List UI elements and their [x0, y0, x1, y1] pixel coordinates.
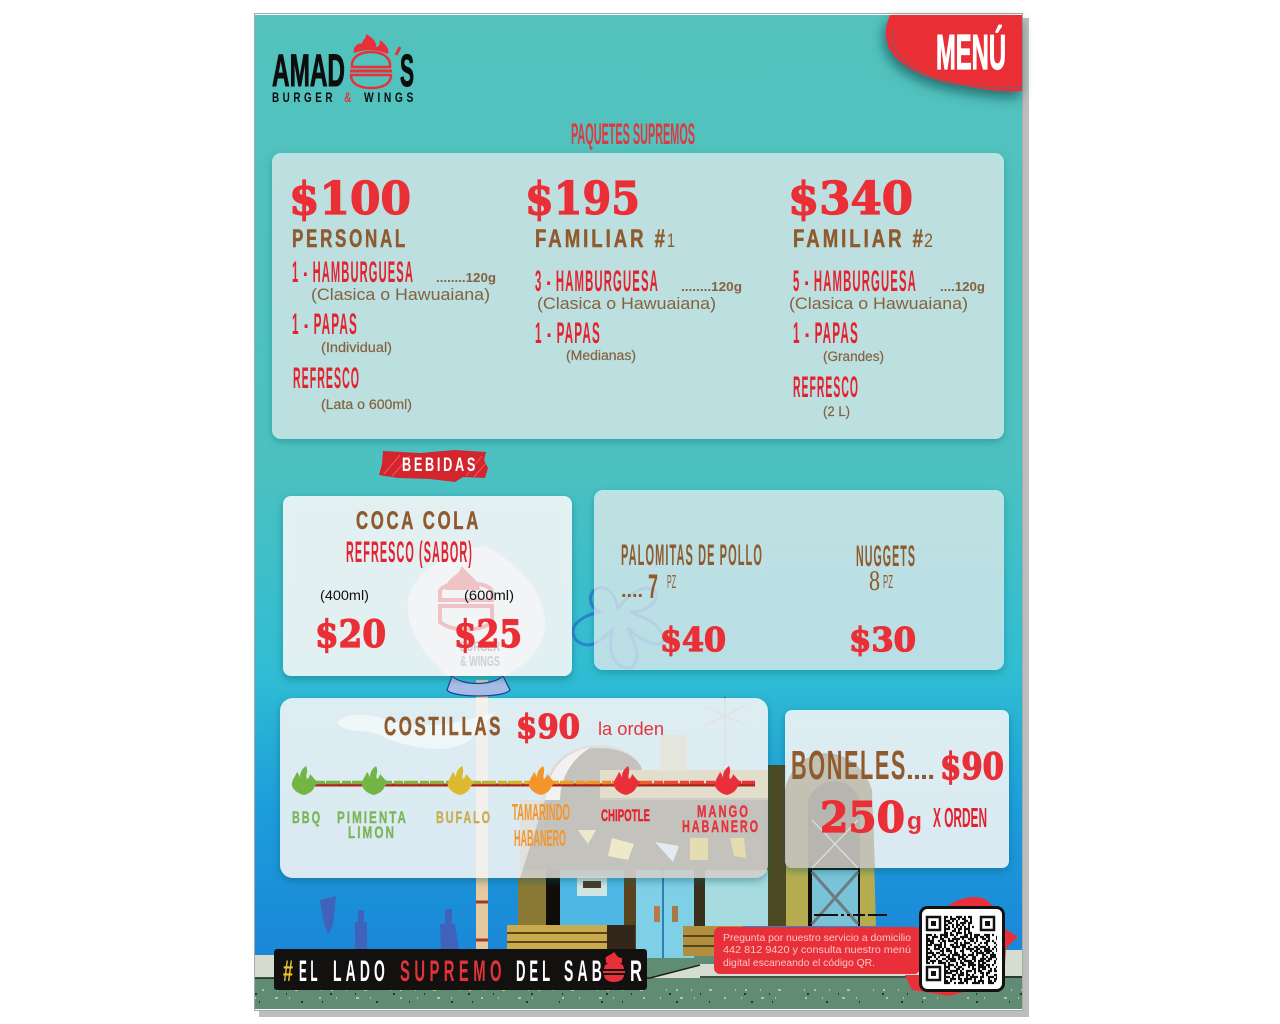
- package: personal: (Clasica o Hawuaiana): [311, 285, 490, 304]
- ghost logo behind soda prices: [440, 566, 500, 670]
- ghost arch inside boneles panel: [785, 753, 875, 868]
- bar background: [274, 949, 647, 990]
- nuggets quantity: [869, 566, 893, 597]
- package: familiar 1: [525, 172, 742, 363]
- package: personal: (Individual): [321, 340, 392, 355]
- logo wordmark: AMAD: [272, 45, 345, 96]
- logo tagline: WINGS: [364, 89, 417, 105]
- title: BONELES: [791, 742, 907, 788]
- title: COSTILLAS: [384, 711, 503, 741]
- card: costillas: TAMARINDO: [512, 799, 570, 825]
- wooden planks: [507, 925, 607, 949]
- page drop shadow: [259, 18, 1029, 1017]
- card: palomitas and nuggets: PALOMITAS DE POLLO: [621, 539, 763, 572]
- flame: bufalo: [448, 766, 475, 795]
- heat scale rope: [300, 782, 755, 785]
- package: familiar 1: (Medianas): [566, 348, 636, 363]
- package: familiar 1: (Clasica o Hawuaiana): [537, 294, 716, 313]
- text: PAQUETES SUPREMOS: [571, 118, 695, 151]
- palomitas quantity: ....: [621, 580, 643, 602]
- flame: chipotle: [614, 766, 641, 795]
- page frame: [254, 14, 1022, 1010]
- label: pimienta limon: [337, 808, 408, 842]
- qr code: [920, 908, 1004, 990]
- flame: pimienta limon: [362, 766, 389, 795]
- logo tagline: [272, 89, 417, 105]
- price: $100: [289, 172, 411, 225]
- card: boneles: [791, 742, 1004, 842]
- card: costillas: HABANERO: [514, 825, 566, 851]
- badge brush shape: [379, 450, 488, 482]
- slogan bar: SUPREMO: [400, 955, 506, 988]
- price 600: $25: [454, 612, 522, 656]
- menu badge: MENÚ: [936, 25, 1006, 80]
- name: PERSONAL: [292, 225, 408, 253]
- label: mango habanero: MANGO: [697, 802, 750, 821]
- palomitas price: $40: [660, 620, 726, 659]
- logo tagline: &: [344, 89, 355, 105]
- package: personal: 1 - HAMBURGUESA: [292, 256, 414, 289]
- callout text: [723, 932, 911, 969]
- ghost building inside costillas panel: [520, 735, 768, 878]
- panel: paquetes supremos background: [272, 153, 1004, 439]
- palomitas quantity: 7: [648, 568, 658, 606]
- bottles: [320, 896, 459, 952]
- package: familiar 1: 1 - PAPAS: [535, 317, 601, 350]
- package: familiar 2: 2: [924, 231, 933, 252]
- qr finder centers: [931, 921, 990, 976]
- panel: boneles background: [785, 710, 1009, 868]
- callout text: 442 812 9420 y consulta nuestro menú: [723, 944, 911, 956]
- flag pole: [476, 680, 488, 952]
- card: boneles: X ORDEN: [933, 802, 987, 833]
- badge text: BEBIDAS: [402, 455, 478, 476]
- weight: 250: [820, 793, 905, 842]
- label: tamarindo habanero: [512, 799, 570, 851]
- slogan bar: EL: [299, 955, 321, 988]
- gram unit: g: [907, 808, 922, 835]
- bebidas badge: [379, 450, 488, 482]
- package: familiar 1: 3 - HAMBURGUESA: [535, 265, 659, 298]
- package: familiar 1: 1: [667, 231, 675, 252]
- logo: S: [400, 45, 414, 96]
- nuggets quantity: 8: [869, 566, 880, 597]
- callout bubble: [714, 927, 920, 974]
- character: white cloud head: [408, 546, 545, 676]
- package: familiar 2: REFRESCO: [793, 371, 859, 404]
- card: coca cola: REFRESCO (SABOR): [346, 536, 473, 569]
- title: COCA COLA: [356, 507, 481, 535]
- package: personal: (Lata o 600ml): [321, 397, 412, 412]
- flame: bbq: [292, 766, 319, 795]
- label: bbq: BBQ: [292, 808, 322, 827]
- label: pimienta limon: PIMIENTA: [337, 808, 408, 827]
- card: costillas: [292, 707, 760, 851]
- contact callout: [714, 897, 1018, 996]
- price 400: $20: [315, 612, 386, 656]
- slogan text: #: [283, 955, 293, 988]
- slogan bar: LADO: [333, 955, 389, 988]
- red splash behind qr: [905, 897, 1018, 996]
- panel: costillas background: [280, 698, 768, 878]
- arched lattice window: [786, 755, 876, 926]
- panel: palomitas and nuggets background: [594, 490, 1004, 670]
- card: palomitas and nuggets: PZ: [883, 572, 893, 592]
- price: $195: [525, 172, 640, 225]
- package: personal: REFRESCO: [293, 362, 360, 395]
- card: coca cola: [315, 507, 522, 656]
- qr frame: [920, 908, 1004, 990]
- dots: ....: [906, 754, 935, 785]
- ghost logo behind soda prices: & WINGS: [460, 653, 500, 670]
- price: $340: [788, 172, 913, 225]
- card: palomitas and nuggets: [621, 539, 916, 659]
- background scene: restaurant illustration: [255, 546, 1022, 1009]
- la orden: la orden: [598, 719, 664, 739]
- size 600: (600ml): [464, 588, 514, 603]
- callout text: Pregunta por nuestro servicio a domicilio: [723, 932, 911, 944]
- package: familiar 2: [788, 172, 985, 419]
- label: mango habanero: [682, 802, 760, 836]
- qr modules: [926, 917, 997, 983]
- package: familiar 2: 5 - HAMBURGUESA: [793, 265, 917, 298]
- name: FAMILIAR #: [793, 225, 926, 253]
- badge hatch strokes: [384, 455, 486, 477]
- badge scribble: [892, 30, 1022, 87]
- callout text: digital escaneando el código QR.: [723, 957, 875, 969]
- wood posts and windows: [518, 870, 546, 926]
- badge shape: [886, 15, 1022, 91]
- flame: tamarindo habanero: [529, 766, 556, 795]
- package: familiar 2: ....120g: [940, 279, 985, 294]
- package: personal: 1 - PAPAS: [292, 308, 358, 341]
- package: personal: [289, 172, 496, 412]
- package: familiar 2: (Grandes): [823, 349, 884, 364]
- label: pimienta limon: LIMON: [348, 823, 396, 842]
- ghost flag behind title: [337, 712, 495, 749]
- price: $90: [940, 746, 1004, 788]
- card: palomitas and nuggets: PZ: [667, 572, 676, 592]
- package: familiar 2: (Clasica o Hawuaiana): [789, 294, 968, 313]
- label: bufalo: BUFALO: [436, 808, 492, 827]
- building upper structure: [520, 745, 768, 870]
- ghost logo behind soda prices: BURGER: [460, 638, 500, 654]
- package: familiar 2: 1 - PAPAS: [793, 317, 859, 350]
- package: familiar 2: (2 L): [823, 404, 850, 419]
- flame: mango habanero: [715, 766, 742, 795]
- price: $90: [516, 707, 580, 746]
- label: mango habanero: HABANERO: [682, 817, 760, 836]
- qr finder patterns: [927, 917, 994, 980]
- slogan bar: SAB: [564, 955, 606, 988]
- label: chipotle: CHIPOTLE: [601, 806, 650, 825]
- logo: [272, 34, 417, 105]
- page background: [255, 15, 1022, 1009]
- character: flower outline: [573, 588, 664, 668]
- nuggets price: $30: [849, 620, 916, 659]
- package: personal: ........120g: [436, 270, 496, 285]
- package: familiar 1: ........120g: [681, 279, 742, 294]
- panel: coca cola background: [283, 496, 572, 676]
- burger icon: [603, 952, 625, 982]
- slogan bar: DEL: [516, 955, 554, 988]
- logo burger with flame: [350, 34, 400, 88]
- menu badge: [886, 15, 1022, 91]
- slogan bar: R: [630, 955, 642, 988]
- logo tagline: BURGER: [272, 89, 336, 105]
- palomitas quantity: [621, 568, 676, 606]
- slogan bar: [274, 949, 647, 990]
- size 400: (400ml): [320, 588, 369, 603]
- name: FAMILIAR #: [535, 225, 668, 253]
- ground: [255, 976, 1022, 1009]
- text: NUGGETS: [856, 540, 916, 573]
